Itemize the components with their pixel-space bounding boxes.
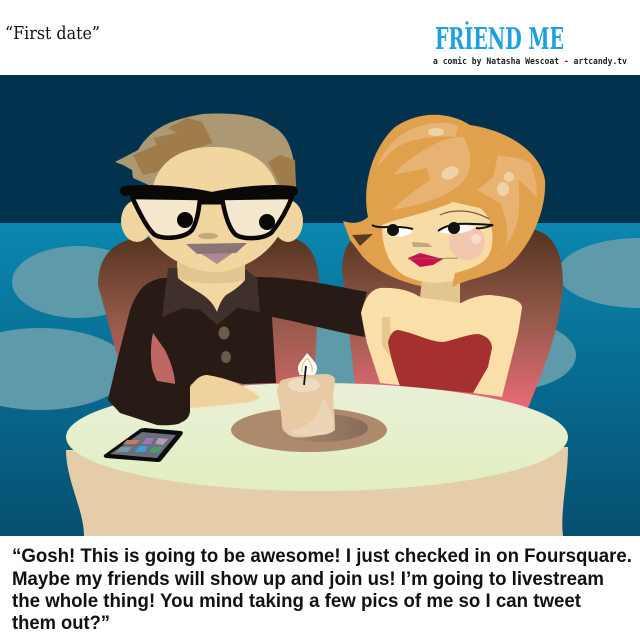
logo: FRIEND ME [435,22,564,57]
shoulders [361,288,522,397]
man's chair [98,238,319,385]
phone [104,428,183,462]
table cloth [66,447,568,536]
caption: them out?” [12,612,110,634]
plate [231,408,387,452]
lips [408,253,458,267]
nose [412,242,433,247]
neck shadow [177,262,245,284]
face [143,147,284,272]
night sky [0,75,640,224]
dress [388,330,492,393]
caption [12,545,632,634]
pupils [177,212,275,230]
mouth [186,243,247,264]
sleeve and hand over table [108,357,260,425]
caption: the whole thing! You mind taking a few pics of me so I can tweet [12,590,581,612]
episode title: “First date” [5,23,100,44]
candle [277,374,335,437]
hair [115,113,296,187]
buttons [218,326,231,363]
neck [177,262,245,312]
jacket [108,277,367,425]
hair highlights [377,123,537,263]
gap between arm and body [151,333,175,384]
neck [420,280,460,303]
hair shine [428,128,514,196]
glasses [125,190,293,238]
face [382,198,497,283]
flame [298,353,317,385]
arm shadow [382,317,392,360]
back hair [350,210,470,286]
scene [0,75,640,536]
logo: a comic by Natasha Wescoat - artcandy.tv [433,56,627,67]
table top [66,383,568,491]
sea [0,223,640,536]
hair [343,115,545,287]
woman's chair [342,230,563,408]
eyes [372,211,493,237]
ears [121,200,303,242]
woman [343,115,545,397]
man [108,113,367,425]
nose [198,233,218,239]
hair shadow [133,118,296,187]
caption: Maybe my friends will show up and join us! I’m going to livestream [12,568,604,590]
hair shadow [352,234,373,246]
background ovals [0,238,640,410]
blush [449,224,485,260]
collar [162,268,260,325]
